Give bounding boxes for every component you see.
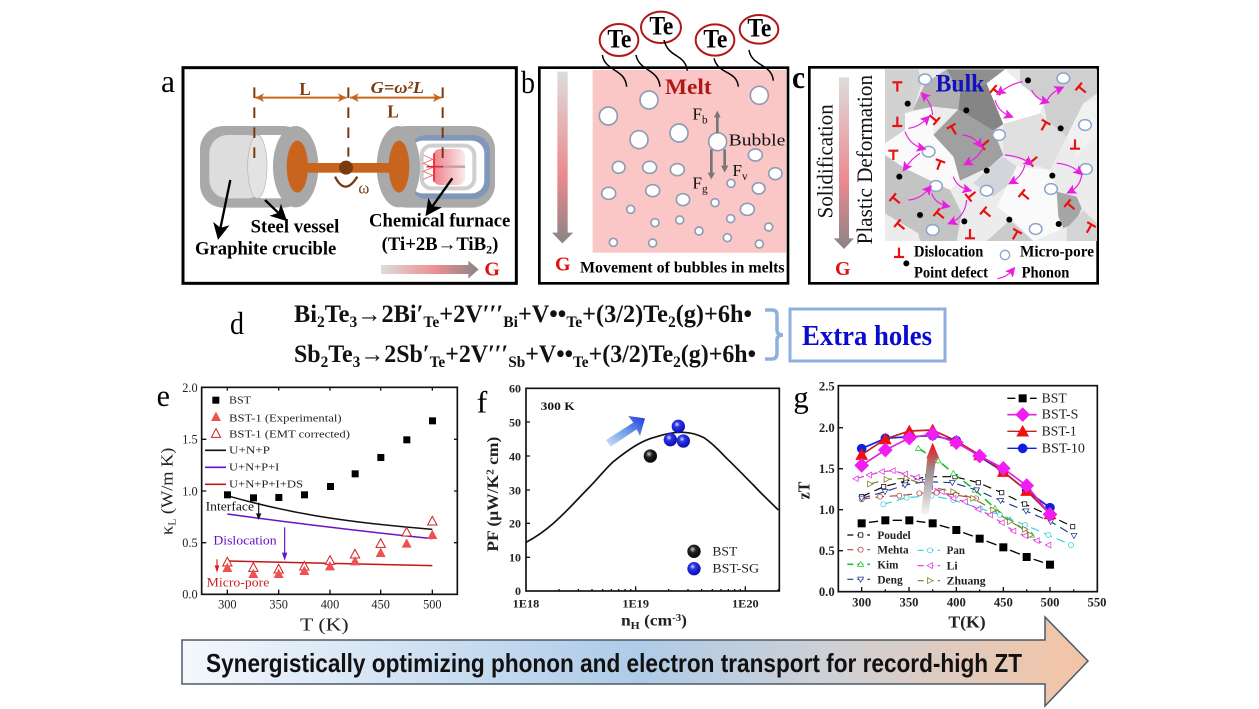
distance dimension lines xyxy=(254,87,443,167)
equation Bi2Te3: +(3/2)Te xyxy=(582,301,668,328)
tick labels: 300 xyxy=(218,598,237,612)
panel letter a: a xyxy=(161,63,175,99)
y axis title: κ xyxy=(158,527,177,535)
force arrows xyxy=(708,111,728,179)
annotation dislocation: Dislocation xyxy=(213,533,277,547)
tick labels: 20 xyxy=(509,517,521,531)
tick labels: 550 xyxy=(1088,595,1106,609)
extra holes box xyxy=(790,309,945,361)
equation Bi2Te3: (g)+6h• xyxy=(676,301,752,328)
gravity arrow xyxy=(552,72,573,243)
panel letter b: b xyxy=(521,64,535,100)
equation Sb2Te3: 2 xyxy=(673,354,681,371)
x axis title: T (K) xyxy=(300,615,349,636)
BST-SG points xyxy=(664,420,690,448)
force labels: F xyxy=(732,161,742,180)
tick labels: 300 xyxy=(852,595,871,609)
dislocations xyxy=(888,82,1096,242)
x axis title: ) xyxy=(681,613,687,630)
tick labels xyxy=(509,382,759,610)
equation Sb2Te3: (g)+6h• xyxy=(681,341,756,368)
literature legend: Zhuang xyxy=(947,574,986,587)
plot axes xyxy=(202,387,457,594)
Te atoms: Te xyxy=(607,23,631,53)
phonon arrows xyxy=(905,82,1082,223)
annotation interface xyxy=(206,500,261,520)
bubbles xyxy=(599,86,782,248)
gravity arrow xyxy=(381,261,479,279)
tick labels: 2.0 xyxy=(182,381,198,395)
BST-1 EMT data xyxy=(223,516,437,573)
omega label: ω xyxy=(358,178,369,197)
equation Bi2Te3: +2V′′′ xyxy=(439,301,503,328)
summary text: Synergistically optimizing phonon and electron transport for record-high ZT xyxy=(206,648,1022,678)
panel a: centrifuge setup xyxy=(183,68,516,283)
improvement arrow xyxy=(921,443,939,514)
literature legend: Deng xyxy=(877,573,903,586)
BST data xyxy=(224,417,436,501)
force labels: F xyxy=(692,104,702,123)
tick labels: 400 xyxy=(947,595,966,609)
plastic deformation label: Plastic Deformation xyxy=(852,75,877,244)
force labels: F xyxy=(692,173,702,192)
BST-1 experimental data xyxy=(222,530,437,578)
legend: Phonon xyxy=(1022,265,1070,282)
y axis title: zT xyxy=(794,482,813,499)
label G: G xyxy=(835,258,851,280)
grain structure xyxy=(885,69,1097,241)
legend xyxy=(894,244,1094,282)
tick labels: 1E18 xyxy=(513,596,539,610)
tick labels: 1E19 xyxy=(622,596,649,610)
tick labels xyxy=(819,379,1106,609)
bracket xyxy=(765,310,783,359)
tick labels: 400 xyxy=(321,598,339,612)
annotation micro-pore xyxy=(207,559,270,589)
panel letter d: d xyxy=(230,305,244,341)
force labels: Bubble xyxy=(729,130,786,149)
tick labels: 500 xyxy=(423,598,442,612)
direction arrow xyxy=(606,416,645,447)
plot axes xyxy=(838,386,1097,592)
equation Bi2Te3: →2Bi′ xyxy=(357,301,423,328)
BST-S series xyxy=(862,434,1050,514)
model curve xyxy=(526,432,778,542)
legend: BST-1 (Experimental) xyxy=(229,412,342,424)
equation Bi2Te3: Te xyxy=(566,314,582,331)
BST-1 series xyxy=(862,430,1050,514)
literature legend: Mehta xyxy=(877,543,909,556)
tick labels: 40 xyxy=(509,449,521,463)
tick labels xyxy=(182,381,442,612)
tick labels: 0.5 xyxy=(182,536,198,550)
equation Sb2Te3: Te xyxy=(328,341,353,368)
literature legend: Li xyxy=(947,559,958,572)
Te atoms: Te xyxy=(703,23,727,53)
tick labels: 1.5 xyxy=(819,462,835,476)
y axis title: L xyxy=(167,519,178,526)
force labels: v xyxy=(742,171,748,183)
annotation interface: Interface xyxy=(206,500,255,514)
tick labels: 450 xyxy=(371,598,390,612)
annotation dislocation xyxy=(213,527,287,561)
tick labels: 500 xyxy=(1041,595,1059,609)
equation Bi2Te3: 2 xyxy=(317,314,325,331)
tick labels: 0 xyxy=(515,584,521,598)
label G: G xyxy=(555,254,571,276)
legend: Dislocation xyxy=(914,244,984,261)
equation Sb2Te3: 3 xyxy=(353,354,360,371)
force labels: b xyxy=(702,114,708,126)
legend: U+N+P xyxy=(229,444,270,456)
equation Bi2Te3: Te xyxy=(423,314,439,331)
x axis title: n xyxy=(621,613,630,630)
tick labels: 30 xyxy=(509,483,521,497)
main legend: BST-1 xyxy=(1042,423,1077,438)
force labels xyxy=(692,104,786,195)
tick labels: 350 xyxy=(269,598,288,612)
tick labels: 1.5 xyxy=(182,433,198,447)
equation Bi2Te3: Bi xyxy=(294,301,318,328)
solidification label: Solidification xyxy=(812,104,837,218)
tick labels: 50 xyxy=(509,415,521,429)
force labels: g xyxy=(702,183,708,195)
tick labels: 450 xyxy=(994,595,1013,609)
caption: Movement of bubbles in melts xyxy=(580,260,785,277)
equation Sb2Te3: Te xyxy=(573,354,589,371)
BST series xyxy=(862,520,1050,565)
tick labels: 1E20 xyxy=(732,596,759,610)
Te atoms xyxy=(600,11,778,87)
label L left: L xyxy=(299,79,311,99)
y axis title: (W/m K) xyxy=(158,448,177,519)
tick labels: 350 xyxy=(900,595,918,609)
equation Bi2Te3: 3 xyxy=(349,314,357,331)
x axis title: H xyxy=(631,621,640,632)
equation Bi2Te3: 2 xyxy=(668,314,676,331)
micro-pores xyxy=(919,73,1092,235)
literature legend: Pan xyxy=(947,544,965,557)
main legend xyxy=(1007,390,1085,455)
legend xyxy=(205,395,350,490)
legend: BST xyxy=(229,395,251,407)
panel e: lattice thermal conductivity chart xyxy=(157,379,457,636)
label G equation: G=ω²L xyxy=(371,78,424,97)
Te atoms: Te xyxy=(649,11,673,41)
main legend: BST xyxy=(1042,390,1067,405)
legend: BST-SG xyxy=(712,562,759,576)
equation Bi2Te3: Te xyxy=(325,301,349,328)
literature series xyxy=(856,448,1074,545)
panel letter g: g xyxy=(793,380,809,414)
equation Sb2Te3: +V•• xyxy=(525,341,573,368)
tick labels: 0.5 xyxy=(819,544,835,558)
BST-10 series xyxy=(862,436,1050,508)
label G: G xyxy=(484,258,500,280)
model curves xyxy=(227,496,432,566)
panel letter c: c xyxy=(792,59,805,95)
equation Sb2Te3: Te xyxy=(430,354,445,371)
literature legend xyxy=(847,529,986,587)
label reaction: ) xyxy=(492,234,498,255)
panel f: power factor chart xyxy=(477,382,779,632)
bulk label: Bulk xyxy=(936,70,985,98)
label chemical furnace: Chemical furnace xyxy=(369,211,510,232)
label reaction: 2 xyxy=(486,242,492,256)
x axis title: T(K) xyxy=(948,612,986,631)
panel b: bubbles in melt xyxy=(539,11,788,283)
right vessel and chemical furnace xyxy=(377,126,495,208)
annotation micro-pore: Micro-pore xyxy=(207,575,270,589)
equation Sb2Te3: 2 xyxy=(321,354,328,371)
temperature label: 300 K xyxy=(541,399,575,413)
main legend: BST-S xyxy=(1042,407,1078,422)
panel letter f: f xyxy=(477,386,488,420)
legend: BST xyxy=(712,545,738,559)
y axis title: 2 xyxy=(485,469,496,475)
shaft and pivot xyxy=(303,161,392,187)
plot axes xyxy=(526,388,779,591)
melt label: Melt xyxy=(665,74,712,99)
tick labels: 0.0 xyxy=(182,588,198,602)
x axis title: (cm xyxy=(640,613,673,630)
legend: U+N+P+I xyxy=(229,461,280,473)
Te atoms: Te xyxy=(747,13,771,43)
melt region xyxy=(593,70,786,253)
panel d: defect equations xyxy=(294,301,756,371)
label L right: L xyxy=(387,101,399,121)
legend: BST-1 (EMT corrected) xyxy=(229,429,350,441)
legend: Point defect xyxy=(914,265,989,282)
y axis title: cm) xyxy=(485,437,502,469)
literature legend: Poudel xyxy=(877,529,911,542)
equation Sb2Te3: →2Sb′ xyxy=(360,341,430,368)
legend: Micro-pore xyxy=(1020,244,1094,261)
x axis title: -3 xyxy=(672,613,681,624)
main legend: BST-10 xyxy=(1042,440,1085,455)
panel b frame xyxy=(539,68,788,283)
equation Sb2Te3: Sb xyxy=(294,341,322,368)
label reaction: (Ti+2B→TiB xyxy=(382,234,486,255)
tick labels: 10 xyxy=(509,551,521,565)
equation Sb2Te3: +(3/2)Te xyxy=(589,341,673,368)
bottom summary arrow xyxy=(182,617,1088,706)
panel letter e: e xyxy=(157,379,170,413)
tick labels: 1.0 xyxy=(819,503,835,517)
equation Bi2Te3: Bi xyxy=(503,314,518,331)
tick labels: 60 xyxy=(509,382,521,396)
legend: U+N+P+I+DS xyxy=(229,478,303,490)
label graphite crucible: Graphite crucible xyxy=(195,238,336,259)
equation Bi2Te3: +V•• xyxy=(518,301,566,328)
y axis title: PF (μW/K xyxy=(485,484,502,552)
tick labels: 1.0 xyxy=(182,484,198,498)
panel c: bulk microstructure xyxy=(809,67,1098,283)
left steel vessel and graphite crucible xyxy=(200,126,318,208)
equation Sb2Te3: +2V′′′ xyxy=(445,341,508,368)
label steel vessel: Steel vessel xyxy=(251,217,339,238)
tick labels: 2.0 xyxy=(819,421,835,435)
extra holes box: Extra holes xyxy=(802,320,932,352)
legend xyxy=(687,545,759,576)
black pointer arrows xyxy=(219,178,452,233)
literature legend: Kim xyxy=(877,558,899,571)
tick labels: 0.0 xyxy=(819,585,835,599)
equation Sb2Te3: Sb xyxy=(508,354,525,371)
tick labels: 2.5 xyxy=(819,379,835,393)
panel a frame xyxy=(183,68,516,283)
process arrow xyxy=(834,77,854,249)
panel c frame xyxy=(809,67,1098,283)
BST point xyxy=(644,449,657,463)
point defects xyxy=(896,77,1064,227)
panel g: zT chart xyxy=(793,379,1106,631)
